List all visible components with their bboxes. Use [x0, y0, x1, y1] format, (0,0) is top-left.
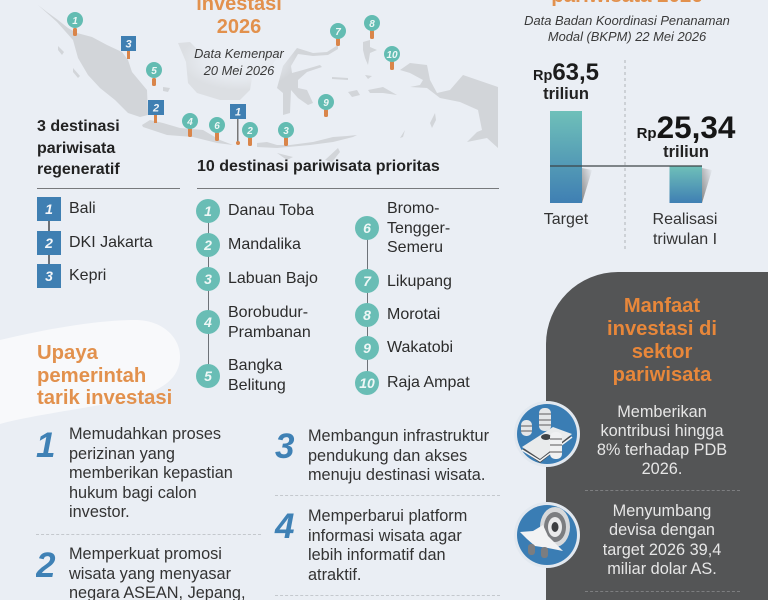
- pin square 2: 2: [152, 102, 159, 114]
- item: Danau Toba: 1: [204, 203, 212, 219]
- heading: upaya pemerintah tarik investasi: Upaya: [37, 342, 98, 364]
- pin 9: 9: [323, 98, 329, 109]
- item: Bromo-Tengger-Semeru: [355, 216, 379, 240]
- list: 10 priority destinations: Morotai: [387, 306, 440, 323]
- list: 3 regenerative destinations: [37, 197, 153, 288]
- item: Raja Ampat: [355, 371, 379, 395]
- text 2: wisata yang menyasar: [69, 564, 231, 582]
- item: Kepri: Kepri: [69, 267, 106, 284]
- benefit 2 text: devisa dengan: [609, 521, 715, 539]
- pin 5: 5: [151, 66, 157, 77]
- chart source note: [524, 13, 730, 44]
- step 2: [36, 545, 246, 600]
- item: Labuan Bajo: [196, 267, 220, 291]
- text 3: [308, 427, 489, 484]
- panel heading: Manfaat: [624, 295, 700, 317]
- benefit 1 text: 8% terhadap PDB: [597, 441, 727, 459]
- chart source note: Data Badan Koordinasi Penanaman: [524, 13, 730, 28]
- label: realisasi triwulan I: [653, 211, 717, 248]
- pin 9: [318, 94, 334, 117]
- pin 7: [330, 23, 346, 46]
- step 1: [36, 425, 233, 521]
- list: 10 priority destinations: Labuan Bajo: [228, 270, 318, 287]
- map: Java: [142, 120, 233, 145]
- item: Likupang: 7: [363, 273, 371, 289]
- item: Bali: 1: [45, 201, 53, 217]
- heading: 3 destinasi pariwisata regeneratif: regeneratif: [37, 161, 120, 178]
- pin 3: [278, 122, 294, 146]
- text 4: Memperbarui platform: [308, 507, 467, 525]
- unit: triliun target: triliun: [543, 85, 589, 103]
- chart: target vs realisasi: [550, 60, 712, 249]
- text 1: memberikan kepastian: [69, 464, 233, 482]
- pin 8: 8: [369, 19, 375, 30]
- heading: 3 destinasi pariwisata regeneratif: pariwisata: [37, 140, 115, 156]
- text 1: perizinan yang: [69, 444, 175, 462]
- pin 2: [242, 122, 258, 146]
- icon: money and coins: [517, 401, 580, 467]
- list: 10 priority destinations: Bromo-: [387, 200, 439, 217]
- item: Danau Toba: [196, 199, 220, 223]
- item: Borobudur-Prambanan: 4: [204, 314, 212, 330]
- benefit 2 text: Menyumbang: [613, 502, 711, 520]
- map: Sumatra: [38, 5, 170, 117]
- heading: upaya pemerintah tarik investasi: pemerintah: [37, 364, 146, 386]
- map source note: Data Kemenpar: [194, 46, 284, 61]
- item: Mandalika: 2: [204, 237, 212, 253]
- text 1: [69, 425, 233, 521]
- item: DKI Jakarta: DKI Jakarta: [69, 234, 153, 251]
- panel heading: [607, 295, 717, 386]
- item: DKI Jakarta: 2: [45, 235, 53, 251]
- step 3: [275, 427, 489, 484]
- list: 10 priority destinations: Mandalika: [228, 236, 301, 253]
- pin 5: [146, 62, 162, 86]
- item: Wakatobi: [355, 336, 379, 360]
- pin 3: 3: [283, 126, 289, 137]
- item: Kepri: 3: [45, 268, 53, 284]
- text 4: lebih informatif dan: [308, 546, 446, 564]
- number 2: 2: [36, 546, 55, 585]
- step 4: [274, 507, 467, 584]
- item: Likupang: [355, 269, 379, 293]
- label: realisasi triwulan I: Realisasi: [653, 211, 717, 228]
- pin square 3: [121, 36, 136, 59]
- white blob behind heading: [0, 320, 180, 424]
- list: 10 priority destinations: Likupang: [387, 273, 452, 290]
- number 1: 1: [36, 426, 55, 465]
- panel heading: pariwisata: [613, 364, 711, 386]
- benefit 1 text: kontribusi hingga: [600, 422, 724, 440]
- text 1: Memudahkan proses: [69, 425, 221, 443]
- list: 10 priority destinations: Belitung: [228, 376, 286, 394]
- item: DKI Jakarta: [37, 231, 153, 255]
- pin 6: 6: [214, 121, 220, 132]
- item: Morotai: [355, 303, 379, 327]
- bar: realisasi: [670, 166, 702, 203]
- benefit 2 text: miliar dolar AS.: [607, 560, 717, 578]
- map source note: 20 Mei 2026: [204, 63, 274, 78]
- map source note: [194, 46, 284, 78]
- item: Bali: Bali: [69, 200, 96, 217]
- pin 8: [364, 15, 380, 39]
- text 2: [69, 545, 246, 600]
- panel heading: investasi di: [607, 318, 717, 340]
- text 3: Membangun infrastruktur: [308, 427, 489, 445]
- text 3: menuju destinasi wisata.: [308, 466, 485, 484]
- benefit 1 text: 2026.: [642, 460, 682, 478]
- list: 10 priority destinations: Prambanan: [228, 324, 311, 340]
- pin 6: [209, 117, 225, 141]
- heading: 10 destinasi pariwisata prioritas: 10 destinasi pariwisata prioritas: [197, 158, 440, 175]
- heading: 3 destinasi pariwisata regeneratif: [37, 118, 120, 178]
- heading: upaya pemerintah tarik investasi: [37, 342, 172, 409]
- list: 10 priority destinations: Danau Toba: [228, 202, 314, 219]
- benefit 2 text: [603, 502, 721, 578]
- list: 10 priority destinations: Bangka: [228, 357, 282, 374]
- item: Borobudur-Prambanan: [196, 310, 220, 334]
- map of Indonesia with destination pins: [40, 6, 498, 162]
- icon: target and airplane: [517, 502, 580, 568]
- list: 10 priority destinations: Tengger-: [387, 220, 450, 236]
- item: Raja Ampat: 10: [359, 375, 375, 391]
- item: Mandalika: [196, 233, 220, 257]
- text 1: hukum bagi calon: [69, 484, 197, 502]
- pin square 2: [148, 100, 164, 123]
- item: Bali: [37, 197, 96, 221]
- map: Nusa Tenggara: [257, 135, 357, 162]
- benefit 1 text: Memberikan: [617, 402, 707, 420]
- heading: 3 destinasi pariwisata regeneratif: 3 destinasi: [37, 118, 120, 135]
- map: Maluku: [332, 40, 397, 97]
- pin 1: 1: [72, 16, 78, 27]
- list: 10 priority destinations: [196, 199, 470, 395]
- label: realisasi triwulan I: triwulan I: [653, 231, 717, 248]
- item: Kepri: [37, 264, 106, 288]
- benefit 1 text: [597, 402, 727, 478]
- map: Kalimantan: [178, 42, 283, 100]
- item: Bromo-Tengger-Semeru: 6: [363, 220, 371, 236]
- panel heading: sektor: [632, 341, 692, 363]
- number 4: 4: [275, 507, 294, 546]
- title: target investasi 2026: 2026: [217, 16, 261, 38]
- item: Bangka Belitung: [196, 364, 220, 388]
- text 2: Memperkuat promosi: [69, 545, 222, 563]
- value: target Rp63,5 triliun: Rp63,5: [533, 59, 599, 86]
- unit: triliun realisasi: triliun: [663, 143, 709, 161]
- pin 4: 4: [186, 117, 193, 128]
- pin 1: [67, 12, 83, 36]
- pin 2: 2: [246, 126, 253, 137]
- label: target: Target: [544, 211, 588, 228]
- title: target investasi 2026: [196, 0, 282, 38]
- pin 4: [182, 113, 198, 137]
- text 4: atraktif.: [308, 566, 361, 584]
- bar: target: [550, 111, 582, 203]
- pin square 1: [230, 104, 246, 145]
- list: 10 priority destinations: Wakatobi: [387, 339, 453, 356]
- text 3: pendukung dan akses: [308, 446, 467, 464]
- heading: upaya pemerintah tarik investasi: tarik investasi: [37, 387, 172, 409]
- list: 10 priority destinations: Raja Ampat: [387, 374, 470, 391]
- pin 7: 7: [335, 27, 341, 38]
- panel: manfaat investasi: [546, 272, 768, 600]
- value: realisasi Rp25,34 triliun: Rp25,34: [637, 109, 735, 145]
- pin square 3: 3: [125, 38, 132, 50]
- number 3: 3: [275, 427, 294, 466]
- benefit 2 text: target 2026 39,4: [603, 541, 721, 559]
- map: Papua: [400, 63, 498, 148]
- map: Sulawesi: [277, 45, 338, 115]
- text 4: [308, 507, 467, 584]
- list: 10 priority destinations: Borobudur-: [228, 304, 308, 321]
- bar shadow: target: [582, 168, 592, 203]
- item: Wakatobi: 9: [363, 340, 371, 356]
- bar shadow: realisasi: [702, 168, 712, 203]
- list: 10 priority destinations: Semeru: [387, 239, 443, 256]
- pin 10: [384, 46, 400, 70]
- pin 10: 10: [386, 50, 398, 61]
- item: Bangka Belitung: 5: [204, 368, 212, 384]
- chart source note: Modal (BKPM) 22 Mei 2026: [548, 29, 706, 44]
- pin square 1: 1: [235, 106, 241, 118]
- text 4: informasi wisata agar: [308, 526, 462, 544]
- text 1: investor.: [69, 503, 130, 521]
- item: Labuan Bajo: 3: [204, 271, 212, 287]
- item: Morotai: 8: [363, 307, 371, 323]
